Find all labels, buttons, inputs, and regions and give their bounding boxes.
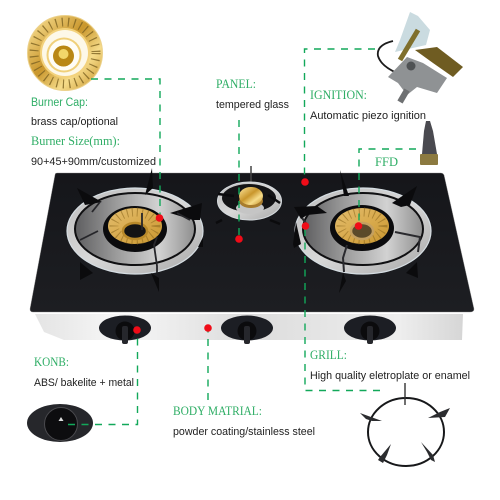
icon: ignition valve [378,12,463,102]
text: burner size: 90+45+90mm/customized [31,156,156,168]
heading: burner size: Burner Size(mm): [31,133,120,148]
control knobs [99,316,396,344]
stove body [35,314,463,340]
dashed leader: ignition [304,49,375,182]
icon: burner cap [28,16,102,90]
right burner [293,170,431,293]
dashed leader: panel [238,120,240,239]
text: body material: powder coating/stainless steel [173,426,315,438]
icon: knob [27,404,93,442]
marker dots [133,178,362,334]
heading: body material: BODY MATRIAL: [173,403,262,418]
icon: FFD thermocouple [420,121,438,165]
text: knob: ABS/ bakelite + metal [34,377,134,389]
text: panel: tempered glass [216,99,289,111]
text: grill: High quality eletroplate or enamel [310,370,470,382]
glass panel [30,173,474,312]
dashed leader: grill [305,226,380,390]
heading: burner cap: Burner Cap: [31,97,88,109]
left burner [67,168,203,292]
dashed leader: FFD [359,149,416,226]
text: burner cap: brass cap/optional [31,116,118,128]
heading: knob: KONB: [34,354,69,369]
heading: ignition: IGNITION: [310,87,367,102]
heading: FFD: FFD [375,154,398,169]
heading: grill: GRILL: [310,347,347,362]
dashed leader: burner cap [91,79,160,218]
middle burner [216,166,282,224]
dashed leader: body [207,328,209,400]
text: ignition: Automatic piezo ignition [310,110,426,122]
dashed leader: knob [68,330,138,424]
icon: grill ring [360,383,450,466]
heading: panel: PANEL: [216,76,256,91]
